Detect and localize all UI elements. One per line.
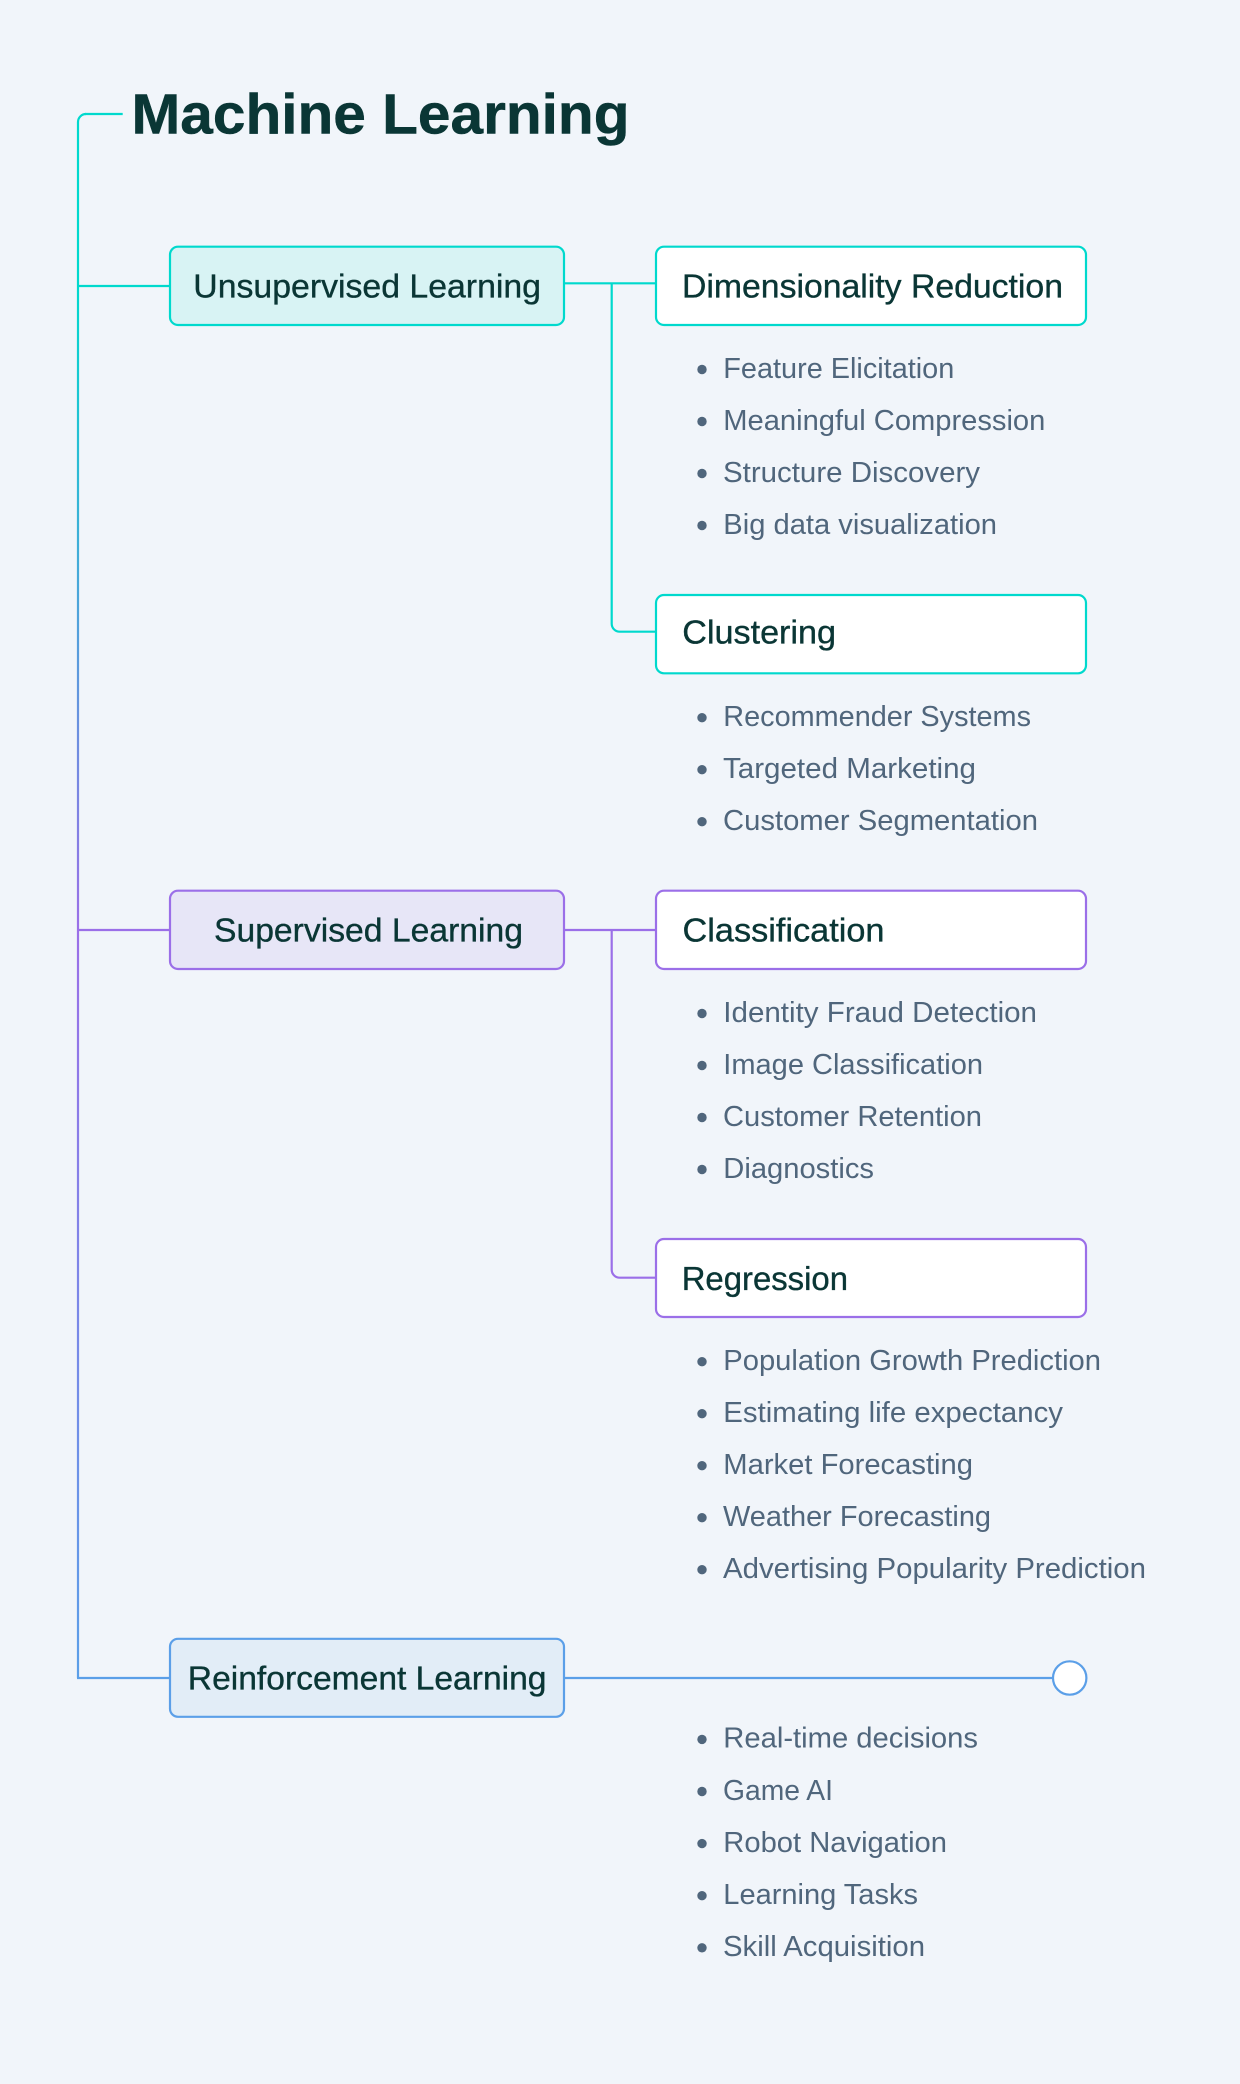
list: reinforcement uses: Game AI xyxy=(723,1775,833,1807)
list: dimensionality reduction uses: Meaningful Compression xyxy=(723,405,1045,437)
list: regression uses: Advertising Popularity Prediction xyxy=(723,1553,1146,1585)
list: reinforcement uses: Robot Navigation xyxy=(723,1827,947,1859)
list: regression uses: Market Forecasting xyxy=(723,1449,973,1481)
panel: supervised learning xyxy=(170,891,1146,1585)
category: reinforcement learning: Reinforcement Learning xyxy=(188,1659,547,1696)
node: dimensionality reduction xyxy=(656,247,1086,325)
main trunk connector xyxy=(77,114,170,1678)
list: dimensionality reduction uses: Big data visualization xyxy=(723,509,997,541)
node: open circle xyxy=(1053,1661,1086,1695)
list: classification uses: Diagnostics xyxy=(723,1153,874,1185)
list: reinforcement uses: Learning Tasks xyxy=(723,1879,918,1911)
list: regression uses xyxy=(697,1345,1146,1585)
list: clustering uses: Recommender Systems xyxy=(723,701,1031,733)
list: classification uses: Image Classification xyxy=(723,1049,983,1081)
panel: unsupervised learning xyxy=(170,247,1086,837)
category: supervised learning xyxy=(170,891,564,969)
connector: supervised branches xyxy=(564,930,656,1278)
list: regression uses: Estimating life expectancy xyxy=(723,1397,1064,1429)
node: classification xyxy=(656,891,1086,969)
list: reinforcement uses xyxy=(697,1723,978,1963)
category: unsupervised learning xyxy=(170,247,564,325)
list: regression uses: Weather Forecasting xyxy=(723,1501,991,1533)
list: clustering uses xyxy=(697,701,1038,837)
list: reinforcement uses: Real-time decisions xyxy=(723,1723,978,1755)
node: regression: Regression xyxy=(682,1260,848,1297)
list: classification uses: Identity Fraud Detection xyxy=(723,997,1037,1029)
list: clustering uses: Targeted Marketing xyxy=(723,753,976,785)
connector: unsupervised branches xyxy=(564,283,656,632)
connector: reinforcement line xyxy=(564,1677,1053,1679)
list: clustering uses: Customer Segmentation xyxy=(723,805,1038,837)
category: supervised learning: Supervised Learning xyxy=(214,912,523,949)
list: reinforcement uses: Skill Acquisition xyxy=(723,1931,925,1963)
list: classification uses xyxy=(697,997,1037,1185)
node: dimensionality reduction: Dimensionality Reduction xyxy=(682,268,1063,305)
list: dimensionality reduction uses xyxy=(697,353,1045,541)
category: unsupervised learning: Unsupervised Learning xyxy=(193,268,541,305)
list: regression uses: Population Growth Prediction xyxy=(723,1345,1101,1377)
node: clustering xyxy=(656,595,1086,673)
node: regression xyxy=(656,1239,1086,1317)
node: classification: Classification xyxy=(682,912,884,949)
title: Machine Learning xyxy=(132,82,630,146)
node: clustering: Clustering xyxy=(682,613,836,650)
category: reinforcement learning xyxy=(170,1639,564,1717)
panel: reinforcement learning xyxy=(170,1639,1086,1963)
list: dimensionality reduction uses: Structure Discovery xyxy=(723,457,981,489)
list: classification uses: Customer Retention xyxy=(723,1101,982,1133)
list: dimensionality reduction uses: Feature Elicitation xyxy=(723,353,954,385)
